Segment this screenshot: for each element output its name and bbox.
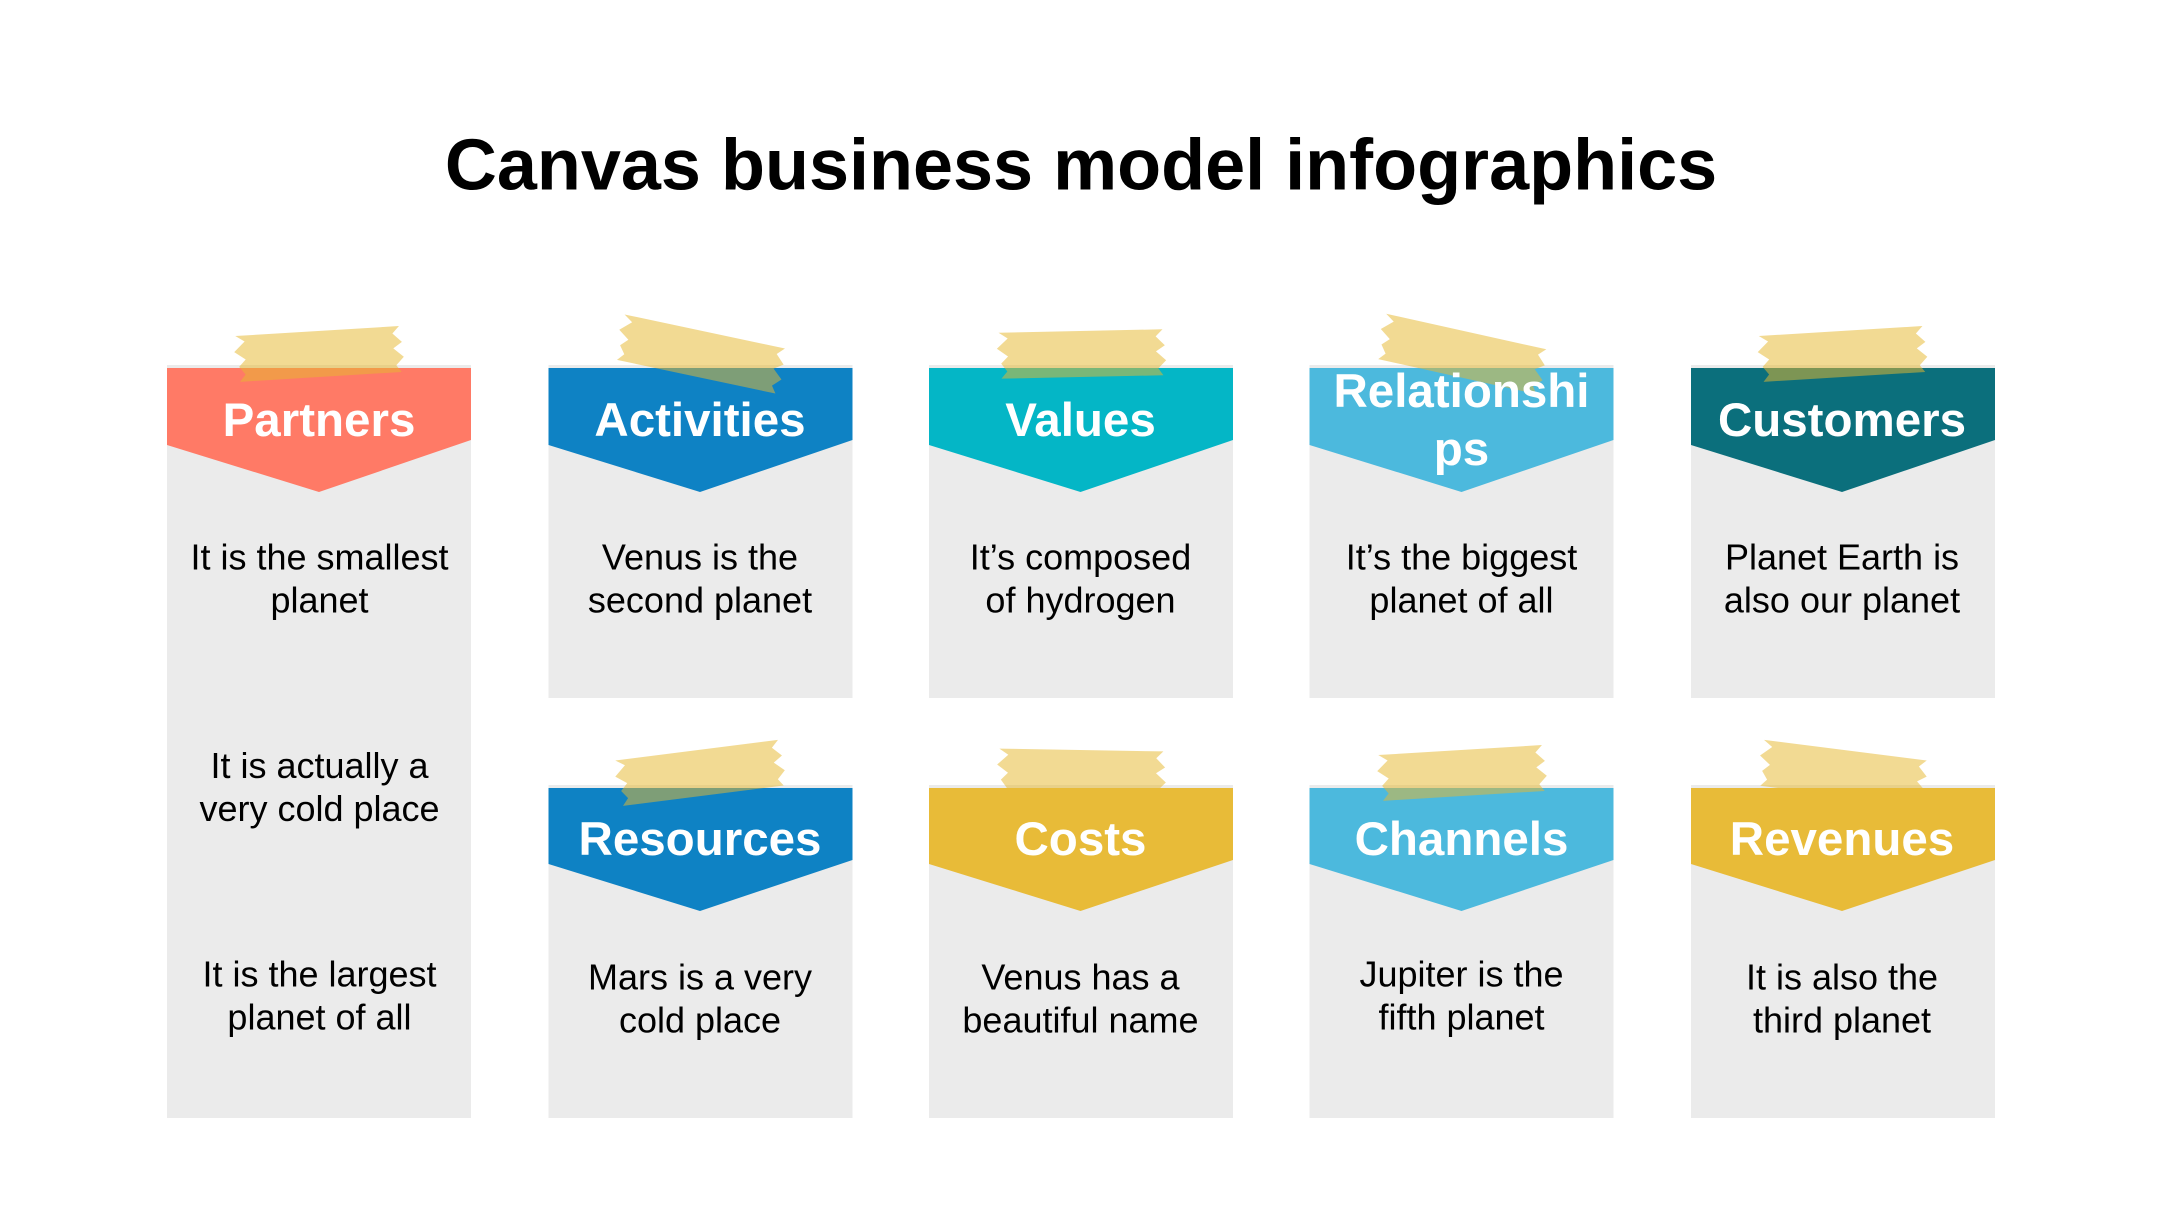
heading: Resources: Resources [579,813,821,866]
header: Resources banner [548,788,852,911]
icon: tape Relationships [1374,313,1549,395]
text: Activities description: second planet [588,580,812,620]
heading: Customers: Customers [1718,394,1966,447]
header: Costs banner [929,788,1233,911]
icon: tape Customers [1757,326,1928,382]
text: Customers description: Planet Earth is [1725,536,1959,578]
text: Costs description: Venus has a [981,956,1181,998]
header: Activities banner [548,368,852,492]
icon: tape Activities [613,314,788,394]
header: Customers banner [1691,368,1995,492]
text: Activities description: Venus is the [602,536,798,578]
text: Partners item 2: very cold place [199,788,440,829]
text: Partners item 1: planet [270,580,369,620]
header: Partners banner [167,368,471,492]
icon: tape Revenues [1756,740,1930,806]
panel: Activities [548,314,852,698]
text: Channels description: Jupiter is the [1359,954,1564,994]
icon: tape Costs [997,749,1166,797]
text: Values description: It’s composed [970,536,1191,578]
panel: Channels [1310,745,1614,1118]
text: Resources description: Mars is a very [588,956,812,998]
header: Channels banner [1310,788,1614,911]
heading: Partners: Partners [223,394,415,447]
header: Relationships banner [1310,368,1614,492]
icon: tape Resources [613,740,787,806]
heading: Values: Values [1005,394,1156,447]
heading: Activities: Activities [594,394,806,447]
heading: Revenues: Revenues [1730,813,1954,866]
heading: Relationships: ps [1434,423,1489,476]
heading: Costs: Costs [1015,813,1146,866]
text: Partners item 3: It is the largest [202,954,437,994]
text: Revenues description: third planet [1753,1000,1931,1040]
panel: Resources [548,740,852,1118]
panel: Relationships [1310,313,1614,698]
heading: Relationships: Relationshi [1333,365,1590,418]
icon: tape Partners [233,326,405,382]
header: Values banner [929,368,1233,492]
icon: tape Channels [1376,745,1548,801]
panel: Costs [929,749,1233,1118]
text: Values description: of hydrogen [985,580,1176,620]
text: Relationships description: planet of all [1369,580,1554,620]
text: Channels description: fifth planet [1378,996,1545,1038]
panel: Customers [1691,326,1995,698]
text: Partners item 1: It is the smallest [190,536,449,578]
text: Partners item 2: It is actually a [210,745,430,786]
text: Resources description: cold place [619,1000,781,1040]
heading: Channels: Channels [1355,813,1568,866]
header: Revenues banner [1691,788,1995,911]
text: Costs description: beautiful name [962,1000,1199,1040]
text: Relationships description: It’s the biggest [1346,536,1577,578]
text: Partners item 3: planet of all [227,996,412,1038]
title: Canvas business model infographics [445,126,1717,206]
panel: Values [929,329,1233,698]
panel: Revenues [1691,740,1995,1118]
text: Customers description: also our planet [1724,580,1960,620]
icon: tape Values [997,329,1166,379]
panel: Partners [167,326,471,1118]
text: Revenues description: It is also the [1746,956,1938,998]
